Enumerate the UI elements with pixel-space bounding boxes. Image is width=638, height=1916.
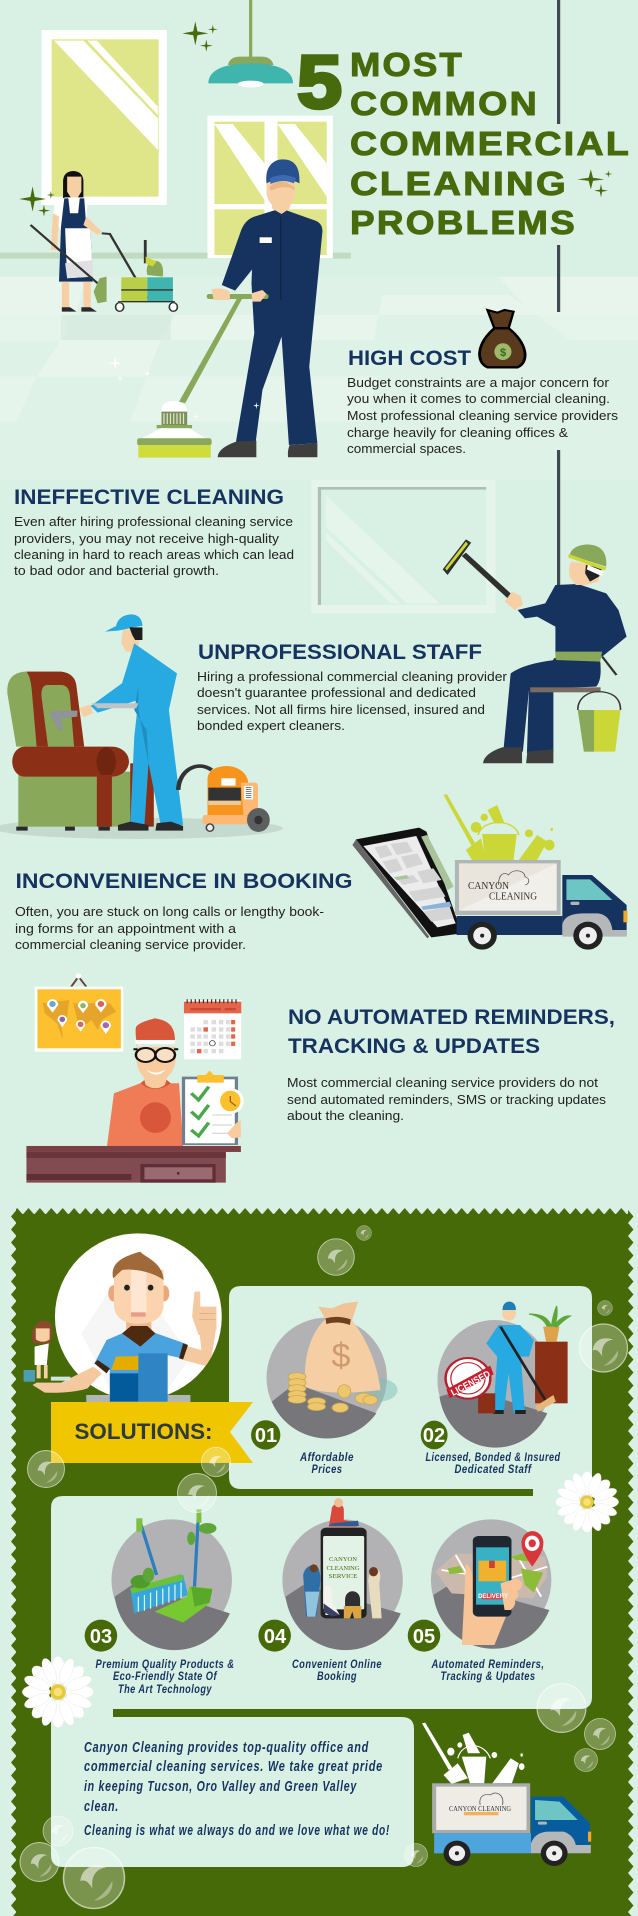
sparkles near lamp [182, 21, 218, 52]
panels: solution cards [51, 1286, 592, 1867]
window washer [443, 539, 627, 763]
solution 02: licensed, bonded and insured staff: LICENSED [449, 1369, 492, 1399]
panel: unprofessional staff: doesn't guarantee professional and dedicated [197, 686, 476, 700]
title [297, 40, 631, 241]
closing text block: Cleaning is what we always do and we love what we do! [84, 1823, 390, 1839]
solution 05: automated reminders: Tracking & Updates [440, 1669, 536, 1683]
banner: solutions [51, 1402, 253, 1463]
panel: ineffective cleaning: providers, you may not receive high-quality [14, 532, 280, 546]
panel: no automated reminders: NO AUTOMATED REMINDERS, [288, 1006, 615, 1029]
title: PROBLEMS [350, 204, 577, 241]
solution 01: affordable prices [251, 1302, 398, 1476]
panel: inconvenience in booking: ing forms for an appointment with a [15, 922, 237, 936]
solution 04: convenient online booking: Convenient Online [292, 1657, 382, 1671]
solution 02: licensed, bonded and insured staff: Dedicated Staff [454, 1462, 532, 1476]
wall base line [0, 253, 351, 259]
title: COMMON [350, 85, 539, 122]
spokesman in circle [24, 1233, 222, 1402]
panel: unprofessional staff [197, 641, 508, 733]
panel: high cost: Budget constraints are a major concern for [347, 376, 610, 390]
solution 03: premium quality products: Premium Quality Products & [96, 1657, 234, 1671]
panel: inconvenience in booking [15, 870, 352, 952]
panel: no automated reminders [287, 1006, 615, 1123]
solution 01: affordable prices: $ [332, 1337, 351, 1375]
solution 03: premium quality products: The Art Technology [118, 1682, 213, 1696]
panel: unprofessional staff: Hiring a professional commercial cleaning provider [197, 670, 508, 684]
phone and truck [352, 794, 627, 950]
panel: high cost: charge heavily for cleaning offices & [347, 426, 569, 440]
solution 03: premium quality products [85, 1509, 235, 1696]
solution 05: automated reminders: Automated Reminders, [431, 1657, 544, 1671]
panel: high cost: commercial spaces. [347, 442, 466, 456]
closing text block: in keeping Tucson, Oro Valley and Green Valley [84, 1779, 357, 1795]
solution 05: automated reminders [408, 1519, 551, 1683]
solution 02: licensed, bonded and insured staff: Licensed, Bonded & Insured [426, 1450, 561, 1464]
panel: solutions background with zigzag border [11, 1208, 634, 1916]
high window [311, 480, 496, 613]
solution 02: licensed, bonded and insured staff: 02 [423, 1425, 445, 1447]
solution 05: automated reminders: DELIVERY [478, 1594, 508, 1600]
icon: money bag: $ [500, 347, 506, 359]
closing text block: commercial cleaning services. We take great pride [84, 1759, 383, 1775]
room scene background [0, 0, 638, 480]
solution 03: premium quality products: 03 [90, 1626, 112, 1648]
panel: high cost: HIGH COST [348, 347, 471, 370]
sparkles near title [577, 169, 612, 197]
panel: high cost: Most professional cleaning service providers [347, 409, 618, 423]
soap bubbles [20, 1226, 628, 1908]
panel: inconvenience in booking: commercial cleaning service provider. [15, 938, 246, 952]
panel: unprofessional staff: UNPROFESSIONAL STAFF [198, 641, 482, 664]
solution 04: convenient online booking: CLEANING [326, 1565, 360, 1572]
rope segments [557, 0, 560, 605]
banner: solutions: SOLUTIONS: [74, 1419, 212, 1444]
title: CLEANING [350, 165, 568, 202]
lamp [208, 0, 293, 87]
solution 04: convenient online booking: SERVICE [328, 1573, 358, 1580]
solution 04: convenient online booking: 04 [264, 1626, 287, 1648]
solution 01: affordable prices: Affordable [299, 1450, 354, 1464]
daisies [22, 1471, 619, 1728]
maid with cleaning cart [19, 171, 177, 312]
phone and truck: CANYON [468, 881, 509, 892]
panel: high cost [347, 347, 618, 456]
panel: high cost: you when it comes to commercial cleaning. [347, 392, 610, 406]
panel: no automated reminders: Most commercial cleaning service providers do not [287, 1076, 599, 1090]
solution 01: affordable prices: 01 [255, 1425, 277, 1447]
panel: ineffective cleaning: Even after hiring professional cleaning service [14, 515, 293, 529]
delivery truck with white cleaning supplies: CANYON CLEANING [449, 1805, 511, 1813]
icon: money bag [480, 310, 525, 367]
title: MOST [350, 46, 464, 83]
solution 01: affordable prices: Prices [312, 1462, 342, 1476]
left window [42, 30, 167, 205]
panel: no automated reminders: send automated reminders, SMS or tracking updates [287, 1093, 606, 1107]
closing text block [84, 1740, 390, 1839]
solution 05: automated reminders: 05 [413, 1626, 435, 1648]
panel: ineffective cleaning [14, 486, 294, 578]
panel: no automated reminders: about the cleaning. [287, 1109, 404, 1123]
panel: ineffective cleaning: cleaning in hard to reach areas which can lead [14, 548, 294, 562]
solution 02: licensed, bonded and insured staff [421, 1302, 570, 1476]
solution 04: convenient online booking: Booking [317, 1669, 357, 1683]
upholstery cleaner with vacuum [0, 614, 283, 839]
solution 04: convenient online booking [258, 1498, 403, 1683]
panel: ineffective cleaning: to bad odor and bacterial growth. [14, 564, 219, 578]
center window [208, 116, 333, 258]
title: COMMERCIAL [350, 125, 631, 162]
title: 5 [297, 40, 342, 124]
panel: unprofessional staff: services. Not all firms hire licensed, insured and [197, 703, 485, 717]
closing text block: clean. [84, 1799, 119, 1815]
panel: unprofessional staff: bonded expert cleaners. [197, 719, 345, 733]
panel: inconvenience in booking: Often, you are stuck on long calls or lengthy book- [15, 905, 324, 919]
janitor with floor machine [108, 159, 322, 458]
solution 03: premium quality products: Eco-Friendly State Of [113, 1669, 217, 1683]
closing text block: Canyon Cleaning provides top-quality office and [84, 1740, 369, 1756]
phone and truck: CLEANING [489, 892, 537, 902]
panel: inconvenience in booking: INCONVENIENCE IN BOOKING [16, 870, 352, 893]
panel: no automated reminders: TRACKING & UPDATES [288, 1035, 540, 1058]
panel: ineffective cleaning: INEFFECTIVE CLEANING [14, 486, 284, 509]
solution 04: convenient online booking: CANYON [329, 1556, 357, 1563]
delivery truck with white cleaning supplies [422, 1723, 591, 1866]
man at desk with map, calendar and checklist [26, 973, 244, 1183]
